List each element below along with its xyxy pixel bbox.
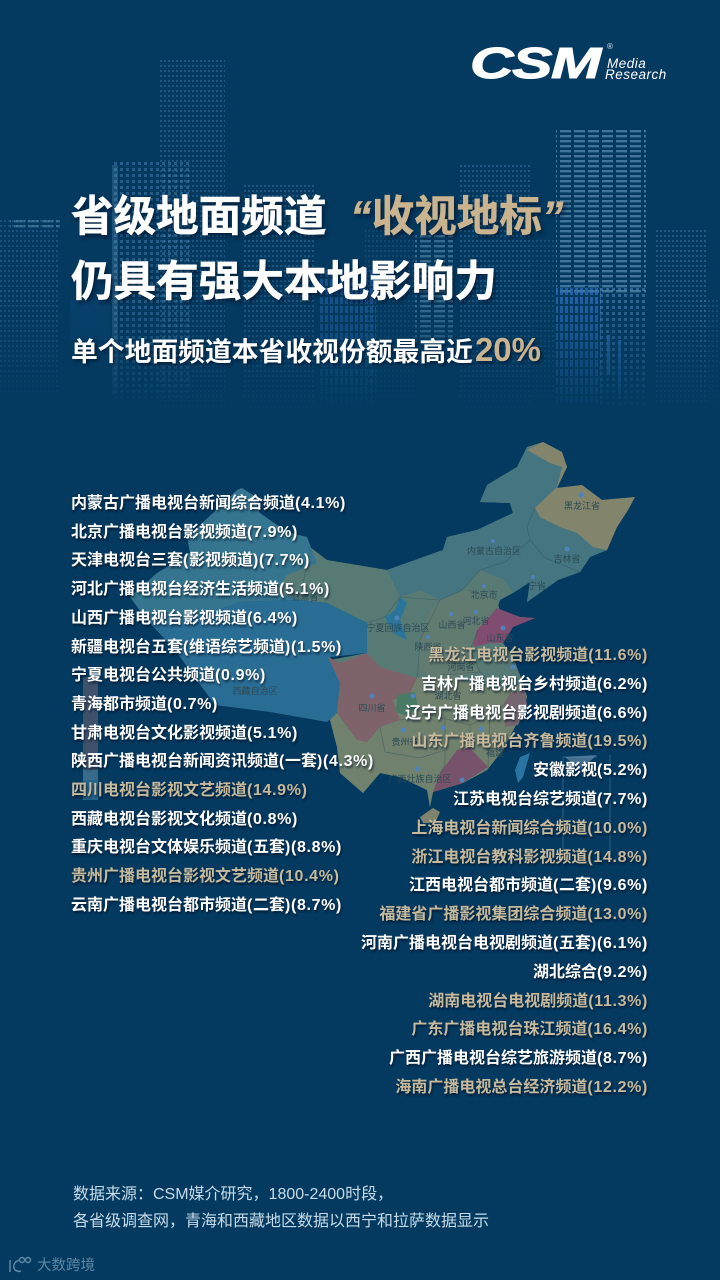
map labels: 福建 <box>486 747 504 758</box>
region: south provinces <box>330 675 527 807</box>
list item highlighted: 山东广播电视台齐鲁频道(19.5%) <box>411 733 648 750</box>
map regions <box>83 442 635 860</box>
logo: CSM Media Research: ® <box>607 42 613 51</box>
subtitle: 单个地面频道本省收视份额最高近20% <box>71 331 541 368</box>
map labels: 宁夏回族自治区 <box>366 622 430 633</box>
list item: 辽宁广播电视台影视剧频道(6.6%) <box>405 705 648 722</box>
background: city skyline <box>0 60 718 402</box>
list item highlighted: 湖南电视台电视剧频道(11.3%) <box>428 993 648 1010</box>
list item: 宁夏电视台公共频道(0.9%) <box>71 667 266 684</box>
map labels: 湖北省 <box>434 690 462 701</box>
map labels: 西藏自治区 <box>232 685 278 696</box>
map labels: 吉林省 <box>553 553 581 564</box>
region: Heilongjiang <box>527 442 635 550</box>
region: north and central base <box>300 442 635 807</box>
source note: 数据来源：CSM媒介研究，1800-2400时段， <box>73 1186 393 1203</box>
list item: 河南广播电视台电视剧频道(五套)(6.1%) <box>361 935 648 952</box>
source note: 各省级调查网，青海和西藏地区数据以西宁和拉萨数据显示 <box>73 1213 489 1230</box>
map labels: 山西省 <box>438 619 466 630</box>
map labels: 陕西省 <box>414 641 442 652</box>
list item: 广西广播电视台综艺旅游频道(8.7%) <box>389 1050 648 1067</box>
list item: 重庆电视台文体娱乐频道(五套)(8.8%) <box>71 839 342 856</box>
island: Hainan <box>420 808 440 823</box>
channel list: left <box>71 494 375 916</box>
faint building overlay <box>563 757 597 860</box>
list item highlighted: 贵州广播电视台影视文艺频道(10.4%) <box>71 868 340 885</box>
list item: 西藏电视台影视文化频道(0.8%) <box>71 811 298 828</box>
list item: 湖北综合(9.2%) <box>533 964 648 981</box>
map labels: 北京市 <box>470 589 498 600</box>
map labels: 广西壮族自治区 <box>388 773 452 784</box>
list item: 安徽影视(5.2%) <box>533 762 648 779</box>
title line 2: 仍具有强大本地影响力 <box>71 258 497 306</box>
list item: 江西电视台都市频道(二套)(9.6%) <box>409 877 648 894</box>
map labels: 河北省 <box>462 615 490 626</box>
region: Sichuan <box>328 653 417 742</box>
logo: CSM Media Research: Media <box>607 56 646 71</box>
region: Shanghai Zhejiang <box>503 690 527 727</box>
region: Xinjiang <box>130 488 317 620</box>
logo: CSM Media Research: Research <box>605 67 667 82</box>
list item: 吉林广播电视台乡村频道(6.2%) <box>421 676 648 693</box>
list item: 陕西广播电视台新闻资讯频道(一套)(4.3%) <box>71 753 374 770</box>
watermark: 大数跨境 <box>37 1258 95 1274</box>
title line 1: 省级地面频道 收视地标” <box>71 193 563 241</box>
list item highlighted: 广东广播电视台珠江频道(16.4%) <box>411 1021 648 1038</box>
map labels: 甘肃省 <box>291 591 319 602</box>
map labels <box>232 500 600 784</box>
region: Gansu label block <box>275 560 335 600</box>
map labels: 黑龙江省 <box>564 500 600 511</box>
island: Taiwan <box>515 753 530 783</box>
region: Hebei Shanxi Henan <box>418 590 500 680</box>
list item: 河北广播电视台经济生活频道(5.1%) <box>71 581 330 598</box>
list item: 新疆电视台五套(维语综艺频道)(1.5%) <box>71 638 342 656</box>
region: Chongqing <box>396 692 418 716</box>
source note <box>73 1185 489 1230</box>
list item highlighted: 福建省广播影视集团综合频道(13.0%) <box>379 906 648 923</box>
list item highlighted: 上海电视台新闻综合频道(10.0%) <box>411 820 648 837</box>
map labels: 内蒙古自治区 <box>467 545 521 556</box>
map labels: 河南省 <box>447 661 475 672</box>
map labels: 宁省 <box>528 580 546 591</box>
map location dots <box>370 492 584 782</box>
logo: CSM Media Research: CSM <box>470 39 600 88</box>
logo: CSM Media Research <box>470 39 667 88</box>
map labels: 贵州省 <box>391 736 419 747</box>
list item: 北京广播电视台影视频道(7.9%) <box>71 524 298 541</box>
region: Inner Mongolia and northeast <box>387 447 607 602</box>
title line 1: “ <box>350 193 372 241</box>
region: Shandong <box>473 608 535 647</box>
list item: 江苏电视台综艺频道(7.7%) <box>453 791 648 808</box>
map labels: 山东省 <box>486 632 514 643</box>
province borders <box>300 508 580 773</box>
list item: 山西广播电视台影视频道(6.4%) <box>71 610 298 627</box>
watermark <box>9 1256 95 1274</box>
list item highlighted: 四川电视台影视文艺频道(14.9%) <box>71 782 308 799</box>
icon: watermark logo <box>9 1256 32 1272</box>
list item: 天津电视台三套(影视频道)(7.7%) <box>71 552 310 569</box>
list item: 云南广播电视台都市频道(二套)(8.7%) <box>71 897 342 914</box>
list item: 甘肃电视台文化影视频道(5.1%) <box>71 725 298 742</box>
region: Guangdong <box>433 748 488 792</box>
list item: 内蒙古广播电视台新闻综合频道(4.1%) <box>71 495 346 512</box>
list item highlighted: 浙江电视台教科影视频道(14.8%) <box>411 849 648 866</box>
region: Tibet and Qinghai <box>147 600 367 722</box>
list item highlighted: 海南广播电视总台经济频道(12.2%) <box>395 1079 648 1096</box>
list item highlighted: 黑龙江电视台影视频道(11.6%) <box>428 647 648 664</box>
list item: 青海都市频道(0.7%) <box>71 696 218 713</box>
region: Ningxia Shaanxi strip <box>385 597 407 640</box>
map labels: 四川省 <box>358 702 386 713</box>
